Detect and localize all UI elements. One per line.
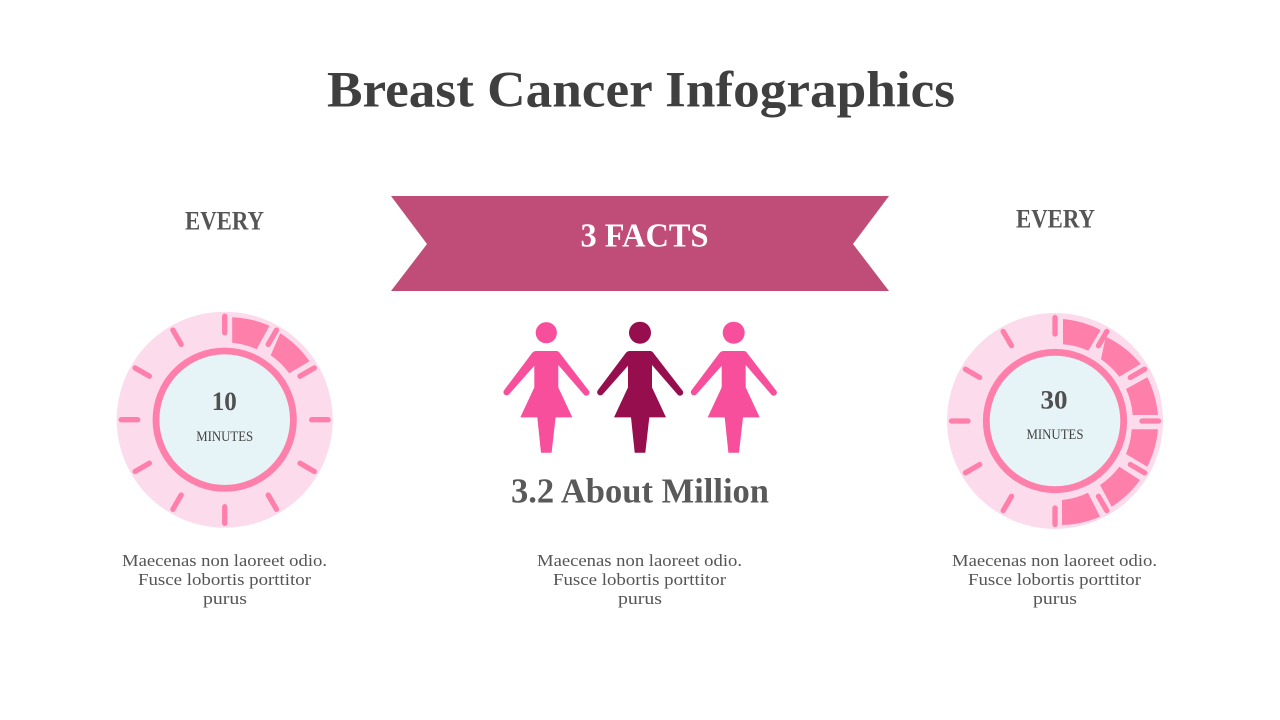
text block: centre: Maecenas non laoreet odio. <box>537 551 742 570</box>
clock face <box>986 352 1124 490</box>
dial: 10 minutes <box>117 312 333 528</box>
dial: 30 minutes <box>947 313 1163 529</box>
text block: left <box>122 551 327 608</box>
banner: 3 facts: 3 FACTS <box>580 218 708 255</box>
unit: minutes: MINUTES <box>1026 427 1084 443</box>
clock ticks <box>952 318 1158 524</box>
icon: woman left <box>503 322 590 453</box>
unit: minutes: MINUTES <box>196 429 253 445</box>
text block: centre <box>537 551 742 608</box>
value: 30: 30 <box>1040 384 1068 414</box>
text block: right <box>952 551 1157 608</box>
text block: centre: Fusce lobortis porttitor <box>553 570 726 589</box>
icon: woman centre <box>597 322 683 453</box>
text block: left: purus <box>203 589 247 608</box>
text block: right: Maecenas non laoreet odio. <box>952 551 1157 570</box>
banner: 3 facts <box>391 196 889 291</box>
text block: left: Fusce lobortis porttitor <box>138 570 311 589</box>
text block: right: purus <box>1033 589 1077 608</box>
icon: three women <box>503 322 777 453</box>
clock face <box>156 351 293 488</box>
filled segments: 30 minutes <box>1062 319 1158 525</box>
statistic: 3.2 About Million <box>511 472 769 510</box>
text block: centre: purus <box>618 589 662 608</box>
title: Breast Cancer Infographics <box>327 62 955 118</box>
filled segments: 10 minutes <box>232 317 310 373</box>
value: 10: 10 <box>212 386 237 416</box>
text block: right: Fusce lobortis porttitor <box>968 570 1141 589</box>
heading: right every: EVERY <box>1016 203 1095 233</box>
icon: woman right <box>691 322 777 453</box>
text block: left: Maecenas non laoreet odio. <box>122 551 327 570</box>
clock ticks <box>121 316 328 523</box>
heading: left every: EVERY <box>185 205 264 235</box>
